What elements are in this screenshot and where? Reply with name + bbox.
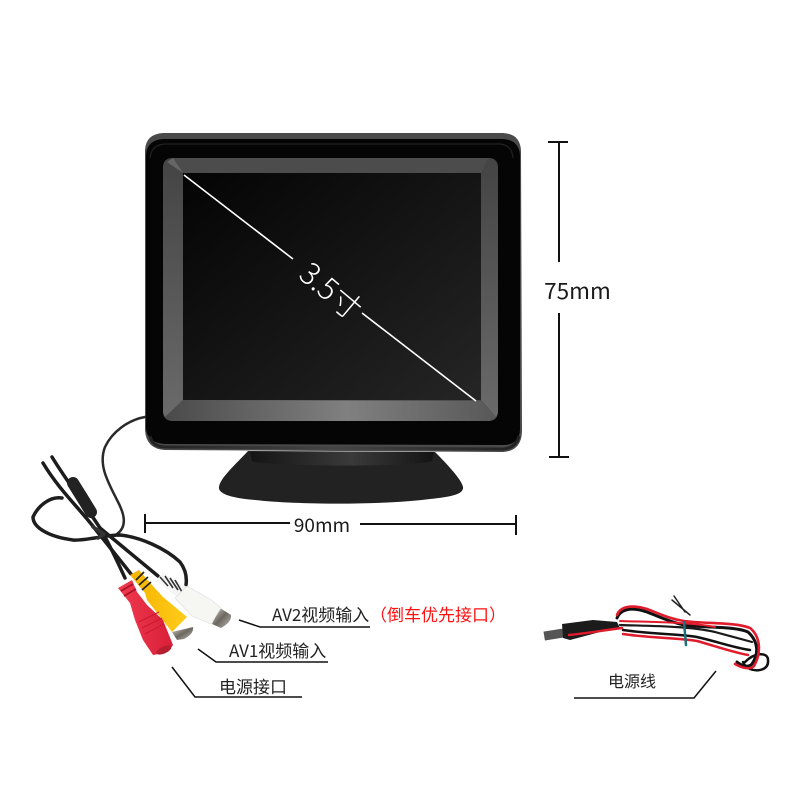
label: AV1 video input: AV1视频输入 (229, 637, 326, 662)
dimension: 75mm height: 75mm (544, 274, 611, 306)
label: power connector (172, 667, 302, 698)
icon: monitor stand (219, 451, 463, 504)
icon: yellow RCA plug (130, 570, 193, 640)
label: AV2 video input: AV2视频输入 (272, 601, 369, 626)
icon: white RCA plug (156, 573, 231, 628)
dimension: 75mm height (544, 142, 611, 457)
diagonal size marker: 3.5寸 (184, 175, 476, 401)
label: power connector: 电源接口 (219, 673, 287, 698)
icon: AV cable bundle (33, 417, 186, 585)
icon: power cable (543, 596, 768, 670)
monitor bezel (163, 158, 498, 421)
icon: monitor (145, 133, 522, 452)
monitor screen (183, 173, 481, 400)
dimension: 90mm width (145, 511, 516, 538)
label: power cable: 电源线 (608, 668, 656, 692)
icon: red RCA plug (118, 580, 173, 657)
dimension: 90mm width: 90mm (294, 511, 350, 538)
label: power cable (574, 668, 716, 698)
diagonal size marker: 3.5寸: 3.5寸 (291, 250, 373, 329)
label: AV2 video input (239, 601, 506, 627)
label: rear-view priority note: （倒车优先接口） (370, 601, 506, 626)
